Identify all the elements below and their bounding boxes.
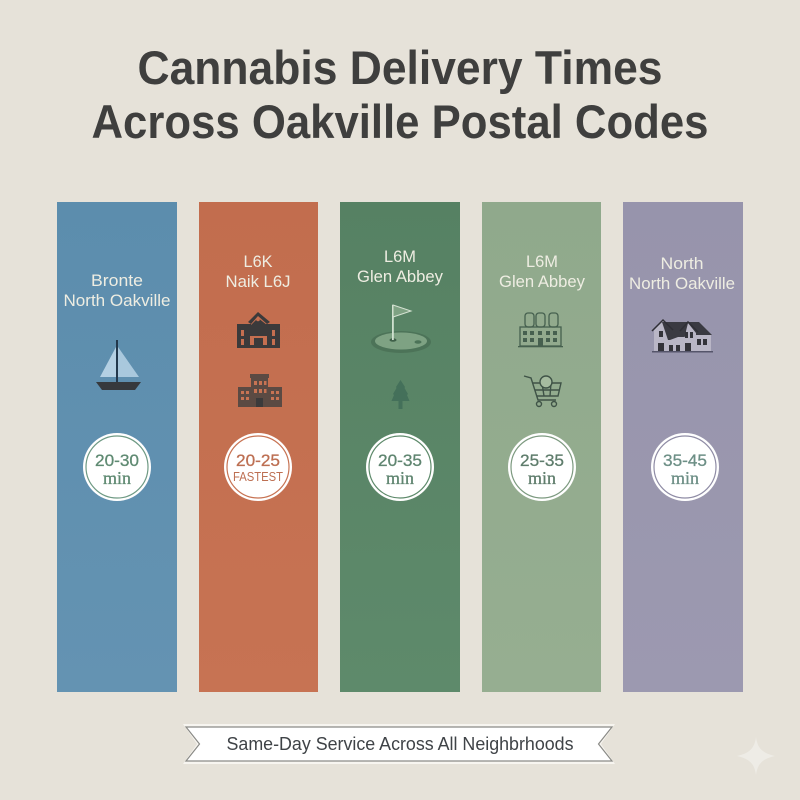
time badge — [224, 433, 292, 501]
panel background — [340, 202, 460, 692]
neighbourhood label — [226, 253, 290, 291]
time badge — [508, 433, 576, 501]
icon: sailboat — [96, 340, 141, 390]
neighbourhood label: Glen Abbey — [357, 268, 444, 286]
neighbourhood label: L6M — [526, 253, 558, 271]
panel: L6K Naik L6J — [199, 202, 318, 692]
time badge: min — [528, 468, 556, 488]
title: Across Oakville Postal Codes — [92, 95, 708, 148]
time badge: min — [103, 468, 131, 488]
neighbourhood label: Glen Abbey — [499, 273, 586, 291]
neighbourhood label: North — [660, 255, 704, 273]
icon: sparkle — [737, 737, 775, 775]
icon: mansion — [518, 313, 563, 347]
neighbourhood label: Bronte — [91, 272, 143, 290]
icon: school — [237, 312, 280, 348]
neighbourhood label — [499, 253, 586, 291]
neighbourhood label: North Oakville — [64, 292, 170, 310]
panel: L6M Glen Abbey (shops) — [482, 202, 601, 692]
neighbourhood label: L6K — [244, 253, 272, 271]
neighbourhood label: Naik L6J — [226, 273, 290, 291]
time badge: FASTEST — [233, 469, 283, 484]
time badge: min — [671, 468, 699, 488]
panel: North Oakville — [623, 202, 743, 692]
title — [92, 41, 708, 148]
neighbourhood label — [357, 248, 444, 286]
icon: apartment building — [238, 374, 282, 407]
icon: houses — [652, 320, 713, 352]
time badge — [651, 433, 719, 501]
neighbourhood label: North Oakville — [629, 275, 735, 293]
icon: golf green and flag — [371, 305, 431, 353]
icon: tree — [392, 380, 410, 409]
time badge: 25-35 — [520, 451, 564, 470]
panel background — [623, 202, 743, 692]
panel background — [482, 202, 601, 692]
time badge: 20-25 — [236, 451, 280, 470]
time badge: 20-30 — [95, 451, 139, 470]
time badge — [366, 433, 434, 501]
neighbourhood label: L6M — [384, 248, 416, 266]
neighbourhood label — [629, 255, 735, 293]
time badge: 20-35 — [378, 451, 422, 470]
title: Cannabis Delivery Times — [138, 41, 662, 94]
panel: Bronte — [57, 202, 177, 692]
icon: shopping cart — [524, 376, 561, 406]
time badge: min — [386, 468, 414, 488]
time badge: 35-45 — [663, 451, 707, 470]
ribbon banner — [183, 724, 615, 764]
panel background — [199, 202, 318, 692]
time badge — [83, 433, 151, 501]
panel: L6M Glen Abbey (golf) — [340, 202, 460, 692]
panel background — [57, 202, 177, 692]
ribbon banner: Same-Day Service Across All Neighbrhoods — [226, 734, 574, 754]
neighbourhood label — [64, 272, 170, 310]
